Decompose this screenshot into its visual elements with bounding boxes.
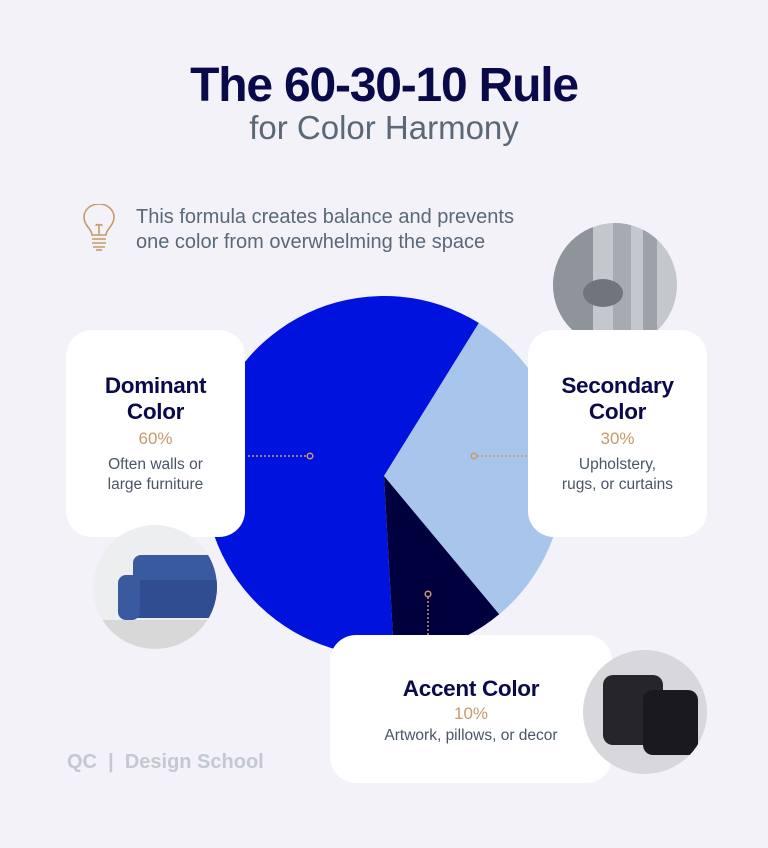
card: secondary: Color [589, 399, 646, 424]
card: secondary: rugs, or curtains [562, 476, 673, 493]
card: dominant: 60% [138, 429, 173, 448]
card: dominant [66, 330, 245, 537]
card: secondary: Upholstery, [579, 456, 656, 473]
title: The 60-30-10 Rule [190, 59, 578, 112]
card: secondary: 30% [600, 429, 635, 448]
logo: QC | Design School [67, 751, 264, 773]
icon: lightbulb [83, 204, 115, 251]
card: accent: Accent Color [403, 676, 539, 701]
card: dominant: Color [127, 399, 184, 424]
intro text: This formula creates balance and prevents [136, 206, 514, 228]
card: secondary [528, 330, 707, 537]
intro text: one color from overwhelming the space [136, 231, 485, 253]
card: dominant: Dominant [105, 373, 206, 398]
intro text [136, 206, 514, 253]
card: accent: Artwork, pillows, or decor [384, 727, 558, 744]
photo: sofa [102, 525, 217, 649]
subtitle: for Color Harmony [249, 109, 519, 146]
card: accent [330, 635, 612, 783]
photo: pillows [583, 650, 707, 774]
card: accent: 10% [454, 704, 488, 723]
card: dominant: Often walls or [108, 456, 203, 473]
card: dominant: large furniture [108, 476, 203, 493]
photo: curtain [553, 223, 677, 330]
card: secondary: Secondary [561, 373, 674, 398]
